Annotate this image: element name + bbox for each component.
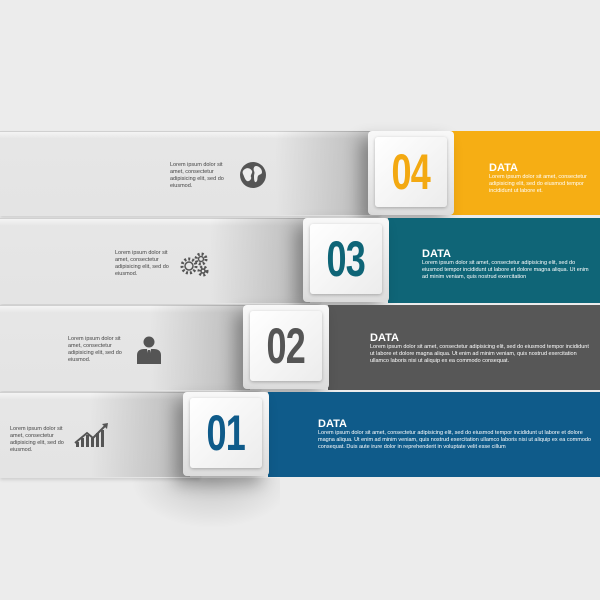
text: data 03: DATA xyxy=(422,248,451,260)
box 03: 03 xyxy=(327,231,365,287)
icon: person xyxy=(137,336,161,364)
box 02 xyxy=(243,305,329,389)
panel: yellow xyxy=(450,131,600,215)
box 01 xyxy=(183,392,269,476)
text: data 04: DATA xyxy=(489,162,518,174)
shadow below xyxy=(110,478,280,548)
text: data 01: DATA xyxy=(318,418,347,430)
text: data 01: Lorem ipsum dolor sit amet, consectetur adipisicing elit, sed do eiusmod tempor incididunt ut labore et dolore magna aliqua. Ut enim ad minim veniam, quis nostrud exercitation ullamco laboris nisi ut aliquip ex ea commodo consequat. Duis aute irure dolor in reprehenderit in voluptate velit esse cillum xyxy=(318,430,591,450)
text: data 03 xyxy=(422,248,589,280)
box 01: 01 xyxy=(207,405,245,461)
icon: globe xyxy=(240,162,266,188)
box 04: 04 xyxy=(392,144,430,200)
text: left 1: Lorem ipsum dolor sit amet, consectetur adipisicing elit, sed do eiusmod. xyxy=(10,426,64,453)
panel: blue xyxy=(268,392,600,477)
box 03 xyxy=(303,218,389,302)
text: data 03: Lorem ipsum dolor sit amet, consectetur adipisicing elit, sed do eiusmod tempor incididunt ut labore et dolore magna aliqua. Ut enim ad minim veniam, quis nostrud exercitation xyxy=(422,260,589,280)
panel: dark gray xyxy=(328,305,600,390)
text: left 4: Lorem ipsum dolor sit amet, consectetur adipisicing elit, sed do eiusmod. xyxy=(170,162,224,189)
box 02: 02 xyxy=(267,318,305,374)
box 04 xyxy=(368,131,454,215)
icon: chart xyxy=(74,423,108,447)
row 2 xyxy=(0,304,600,394)
text: data 01 xyxy=(318,418,591,450)
text: left 2: Lorem ipsum dolor sit amet, consectetur adipisicing elit, sed do eiusmod. xyxy=(68,336,122,363)
text: left 3: Lorem ipsum dolor sit amet, consectetur adipisicing elit, sed do eiusmod. xyxy=(115,250,169,277)
text: data 02 xyxy=(370,332,589,364)
panel: teal xyxy=(388,218,600,303)
row 4 xyxy=(0,130,600,220)
row 1 xyxy=(0,390,600,494)
icon: gears xyxy=(180,252,208,276)
text: data 02: DATA xyxy=(370,332,399,344)
text: data 02: Lorem ipsum dolor sit amet, consectetur adipisicing elit, sed do eiusmod tempor incididunt ut labore et dolore magna aliqua. Ut enim ad minim veniam, quis nostrud exercitation ullamco laboris nisi ut aliquip ex ea commodo consequat. xyxy=(370,344,589,364)
row 3 xyxy=(0,217,600,306)
text: data 04: Lorem ipsum dolor sit amet, consectetur adipisicing elit, sed do eiusmod tempor incididunt ut labore et. xyxy=(489,174,587,194)
text: data 04 xyxy=(489,162,587,194)
